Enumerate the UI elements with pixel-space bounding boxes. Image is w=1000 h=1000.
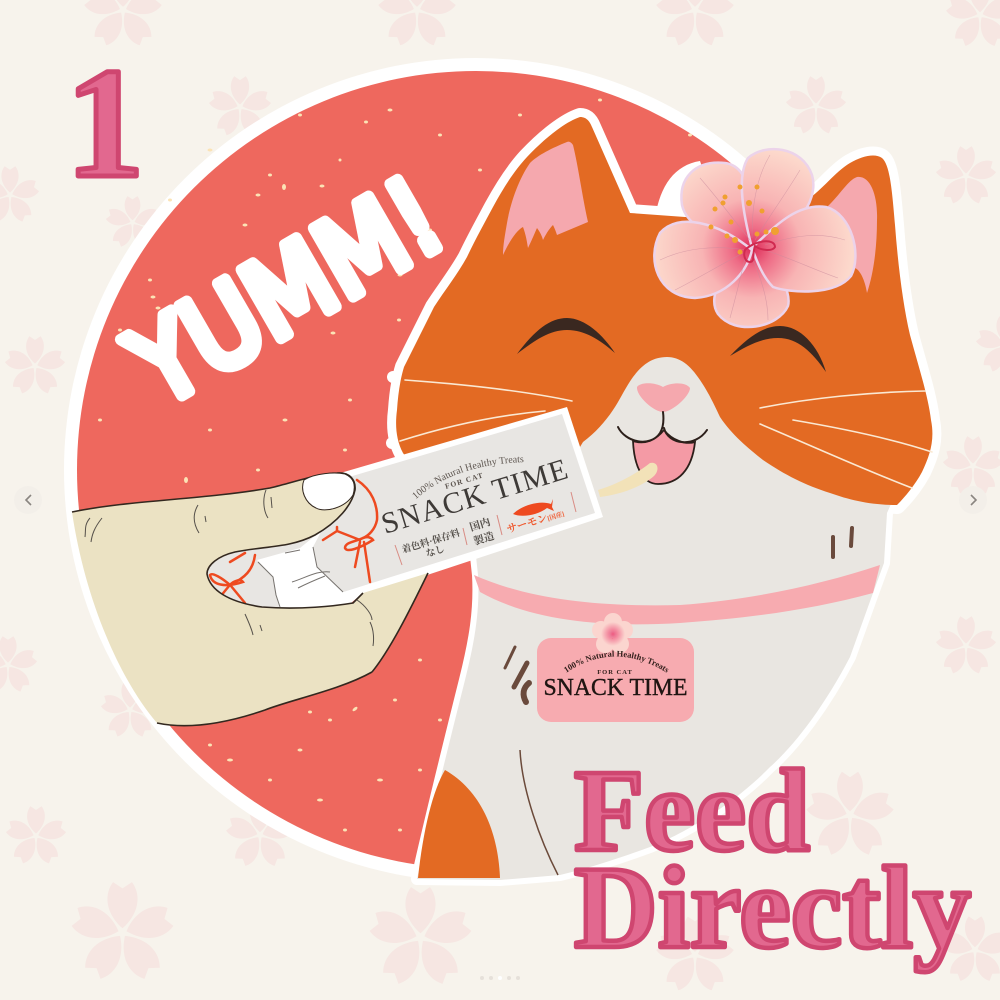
packet cat illustration (257, 530, 363, 612)
snack packet (208, 407, 603, 608)
nav arrow left (14, 486, 42, 514)
packet for cat: FOR CAT (444, 470, 485, 491)
packet salmon label: サーモン[国産] (505, 507, 566, 536)
feed directly heading (574, 745, 971, 973)
right ear inner (827, 177, 877, 293)
nose (637, 383, 690, 412)
whiskers (400, 380, 932, 488)
left ear inner (503, 142, 588, 255)
big circle with speckles (64, 58, 888, 882)
flower veins (660, 155, 845, 320)
badge arc text: 100% Natural Healthy Treats (564, 650, 668, 672)
finger creases (85, 490, 374, 646)
badge flower (592, 613, 633, 653)
paste (598, 463, 657, 497)
mouth (618, 412, 707, 442)
right eye (730, 326, 826, 372)
body line (520, 750, 558, 875)
packet claim 2: 国内 (468, 515, 492, 534)
flower (654, 149, 855, 327)
cat head (396, 117, 932, 505)
cat outline (386, 117, 932, 505)
badge (537, 613, 694, 722)
word directly: Directly (574, 842, 971, 973)
pistil (744, 241, 775, 262)
packet claim 1b: なし (425, 544, 446, 560)
packet claim 2b: 製造 (472, 529, 496, 548)
packet dividers (395, 492, 576, 565)
badge brand: SNACK TIME (544, 674, 688, 701)
left eye (517, 318, 615, 354)
badge for cat: FOR CAT (597, 669, 633, 676)
number 1: 1 (66, 36, 144, 211)
thumbnail (303, 473, 354, 510)
stamens (708, 184, 779, 254)
packet arc text: 100% Natural Healthy Treats (412, 456, 524, 499)
salmon icon (513, 499, 554, 516)
collar (474, 565, 880, 624)
packet ribbons (210, 480, 377, 603)
yumm lettering: YUMM! (110, 155, 463, 431)
packet brand: SNACK TIME (377, 453, 572, 541)
word feed: Feed (574, 745, 810, 876)
packet claim 1: 着色料·保存料 (400, 527, 462, 556)
carousel dots (480, 976, 520, 980)
hand (72, 473, 428, 726)
nav arrow right (959, 486, 987, 514)
tongue (633, 430, 695, 484)
cat body (417, 340, 895, 880)
orange patch (418, 770, 500, 878)
chest marks (505, 528, 852, 702)
